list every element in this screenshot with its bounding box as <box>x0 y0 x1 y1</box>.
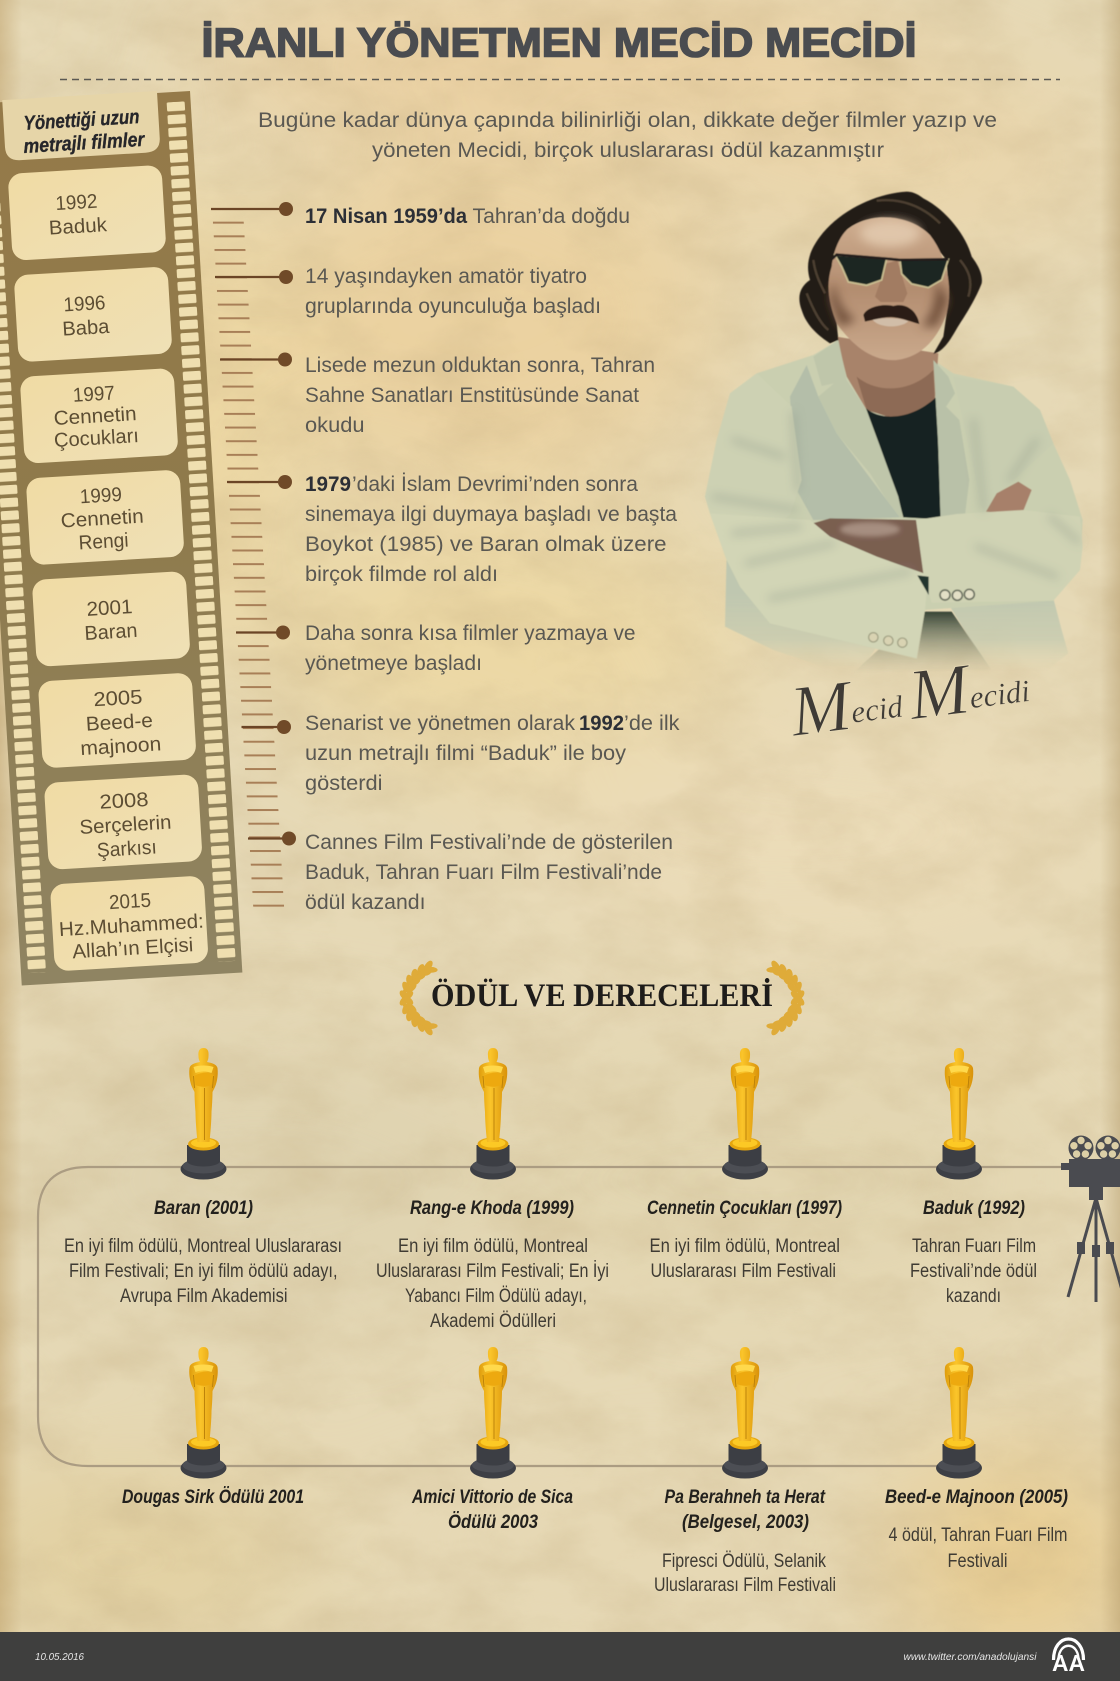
award: Baran 2001: Avrupa Film Akademisi <box>120 1286 288 1307</box>
lower jacket flaps <box>725 553 1068 673</box>
award: Pa Berahneh ta Herat <box>654 1347 836 1596</box>
film frame: 2008 Serçelerin Şarkısı: Serçelerin <box>79 812 172 839</box>
oscar statuette <box>722 1347 768 1478</box>
film frame: 2001 Baran: Baran <box>84 620 138 645</box>
signature: ecidi <box>968 673 1032 715</box>
hair <box>799 192 982 354</box>
left upper arm <box>705 373 802 560</box>
award: Pa Berahneh ta Herat: Pa Berahneh ta Herat <box>664 1487 826 1508</box>
heading text: ÖDÜL VE DERECELERİ <box>431 976 773 1014</box>
hair highlights <box>807 200 970 330</box>
laurel left <box>398 960 438 1036</box>
award: Rang-e Khoda 1999: Rang-e Khoda (1999) <box>410 1198 574 1219</box>
bio: school: Sahne Sanatları Enstitüsünde Sanat <box>305 384 639 407</box>
bio: birth <box>305 205 630 228</box>
film frame: 1999 Cennetin Rengi: 1999 <box>79 484 122 508</box>
timeline ruler ticks <box>212 208 285 918</box>
award: Baduk 1992: kazandı <box>946 1286 1001 1307</box>
header text: Yönettiği uzun <box>23 106 140 135</box>
signature <box>785 641 1034 752</box>
oscar statuette <box>936 1048 982 1180</box>
film strip: feature films <box>0 89 242 986</box>
bio: theatre: 14 yaşındayken amatör tiyatro <box>305 265 587 288</box>
sprocket holes <box>0 101 236 973</box>
film frame: 2008 Serçelerin Şarkısı: 2008 <box>99 789 149 814</box>
film frame: 1999 Cennetin Rengi: Cennetin <box>60 506 144 533</box>
marker 7 <box>248 832 296 846</box>
twitter url: www.twitter.com/anadolujansi <box>904 1651 1037 1663</box>
left sleeve <box>710 513 928 658</box>
sunglasses <box>832 255 948 288</box>
award: Beed-e Majnoon 2005: 4 ödül, Tahran Fuarı Film <box>888 1525 1068 1546</box>
tripod <box>1068 1198 1120 1302</box>
bio: theatre <box>305 265 601 318</box>
film frame: 2005 Beed-e majnoon: majnoon <box>80 733 162 760</box>
bio: Cannes: Baduk, Tahran Fuarı Film Festivali’nde <box>305 861 662 884</box>
bio: short films <box>305 622 636 675</box>
right chest <box>953 377 1053 513</box>
award: Cennetin Çocukları 1997 <box>647 1048 842 1282</box>
award: Douglas Sirk: Dougas Sirk Ödülü 2001 <box>122 1487 304 1508</box>
bio: short films: Daha sonra kısa filmler yazmaya ve <box>305 622 636 645</box>
face <box>829 217 949 360</box>
bio: Cannes: ödül kazandı <box>305 891 426 914</box>
signature: M <box>785 665 859 752</box>
film reels <box>1068 1136 1120 1160</box>
bio: 1992: uzun metrajlı filmi “Baduk” ile boy <box>305 742 627 765</box>
film frame: 1999 Cennetin Rengi: Rengi <box>78 530 129 554</box>
film frame: 1996 Baba: Baba <box>62 316 111 341</box>
film frame: 2015 Hz.Muhammed: Hz.Muhammed: <box>58 911 204 941</box>
award: Baduk 1992: Festivali’nde ödül <box>910 1261 1037 1282</box>
right hand <box>986 482 1032 513</box>
award: Pa Berahneh ta Herat: Uluslararası Film Festivali <box>654 1575 836 1596</box>
film frame: 2015 Hz.Muhammed: 2015 <box>108 890 152 914</box>
jacket folds <box>713 413 1078 598</box>
awards path line <box>38 1167 1062 1466</box>
bio: school: Lisede mezun olduktan sonra, Tahran <box>305 354 655 377</box>
award: Rang-e Khoda 1999: Uluslararası Film Festivali; En İyi <box>376 1261 609 1282</box>
neck <box>837 337 938 421</box>
film frame: 1996 Baba: 1996 <box>63 292 106 317</box>
bio: 1979 <box>305 473 677 586</box>
t-shirt <box>866 397 941 519</box>
award: Baran 2001: En iyi film ödülü, Montreal Uluslararası <box>64 1236 342 1257</box>
award: Cennetin Çocukları 1997: En iyi film ödülü, Montreal <box>650 1236 840 1257</box>
biography timeline <box>211 202 680 914</box>
award: Rang-e Khoda 1999 <box>376 1048 609 1332</box>
award: Douglas Sirk <box>122 1347 304 1508</box>
bio: Cannes: Cannes Film Festivali’nde de gösterilen <box>305 831 673 854</box>
award: Beed-e Majnoon 2005 <box>885 1347 1068 1572</box>
award: Amici Vittorio de Sica <box>411 1347 573 1533</box>
award: Pa Berahneh ta Herat: Fipresci Ödülü, Selanik <box>662 1551 826 1572</box>
award: Baduk 1992: Baduk (1992) <box>923 1198 1025 1219</box>
header text: metrajlı filmler <box>23 129 146 158</box>
neck shadow <box>857 370 935 420</box>
bare forearm <box>813 518 929 575</box>
laurel right <box>766 960 806 1036</box>
marker 5 <box>236 626 290 640</box>
header pane <box>2 91 161 161</box>
oscar statuette <box>470 1347 516 1478</box>
film frame: 2001 Baran: 2001 <box>86 596 133 621</box>
award: Baran 2001 <box>64 1048 342 1307</box>
film frame: 1992 Baduk: 1992 <box>55 191 98 215</box>
award: Cennetin Çocukları 1997: Cennetin Çocukları (1997) <box>647 1198 842 1219</box>
oscar statuette <box>470 1048 516 1180</box>
date: 10.05.2016 <box>35 1651 84 1663</box>
bio: 1979: 1979 <box>305 473 351 496</box>
bio: 1992: ’de ilk <box>624 712 680 735</box>
left lapel <box>813 340 903 517</box>
marker 1 <box>211 202 293 216</box>
nose <box>875 261 907 302</box>
film frame: 2005 Beed-e majnoon: 2005 <box>93 686 143 711</box>
film frame: 2005 Beed-e majnoon: Beed-e <box>85 710 153 736</box>
film frame: 1997 Cennetin Çocukları: Cennetin <box>53 403 137 430</box>
award: Baran 2001: Baran (2001) <box>154 1198 253 1219</box>
award: Pa Berahneh ta Herat: (Belgesel, 2003) <box>682 1512 809 1533</box>
intro text <box>258 109 997 162</box>
bio: 1979: birçok filmde rol aldı <box>305 563 498 586</box>
right sleeve <box>916 510 1083 603</box>
bio: birth: Tahran’da doğdu <box>472 205 630 228</box>
forearm highlight <box>840 522 900 537</box>
film frame: 1997 Cennetin Çocukları: Çocukları <box>53 425 140 452</box>
bio: short films: yönetmeye başladı <box>305 652 482 675</box>
award: Cennetin Çocukları 1997: Uluslararası Film Festivali <box>650 1261 836 1282</box>
film frame: 1992 Baduk <box>8 165 166 261</box>
bio: 1992: Senarist ve yönetmen olarak <box>305 712 576 735</box>
film frame: 1992 Baduk: Baduk <box>48 214 108 240</box>
bio: school: okudu <box>305 414 364 437</box>
award: Beed-e Majnoon 2005: Beed-e Majnoon (2005) <box>885 1487 1068 1508</box>
film frame: 2001 Baran <box>32 571 191 667</box>
film frame: 2015 Hz.Muhammed <box>50 875 209 971</box>
mouth <box>873 318 908 326</box>
film frame: 2008 Serçelerin Şarkısı: Şarkısı <box>96 837 157 862</box>
cuff buttons right <box>940 589 974 600</box>
marker 6 <box>242 720 291 734</box>
intro text: yöneten Mecidi, birçok uluslararası ödül kazanmıştır <box>372 139 884 162</box>
film frame: 2008 Serçelerin Şarkısı <box>44 774 203 870</box>
film frame: 1999 Cennetin Rengi <box>26 469 185 565</box>
award: Baduk 1992 <box>910 1048 1037 1307</box>
film frame: 1997 Cennetin Çocukları: 1997 <box>72 382 115 407</box>
bio: 1979: Boykot (1985) ve Baran olmak üzere <box>305 533 666 556</box>
award: Rang-e Khoda 1999: Akademi Ödülleri <box>430 1311 556 1332</box>
film camera on tripod <box>1061 1136 1120 1302</box>
bio: theatre: gruplarında oyunculuğa başladı <box>305 295 601 318</box>
film frame: 2005 Beed-e majnoon <box>38 672 197 768</box>
bio: school <box>305 354 655 437</box>
icon: AA logo <box>1052 1639 1085 1676</box>
signature: ecid <box>849 688 912 730</box>
intro text: Bugüne kadar dünya çapında bilinirliği olan, dikkate değer filmler yazıp ve <box>258 109 997 132</box>
title: İRANLI YÖNETMEN MECİD MECİDİ <box>202 20 916 66</box>
bio: Cannes <box>305 831 673 914</box>
film frame: 1997 Cennetin Çocukları <box>20 368 179 464</box>
face shading <box>830 220 948 327</box>
award: Rang-e Khoda 1999: Yabancı Film Ödülü adayı, <box>405 1286 587 1307</box>
film frame: 2015 Hz.Muhammed: Allah’ın Elçisi <box>72 934 194 963</box>
bio: 1992: 1992 <box>579 712 624 735</box>
bio: 1992 <box>305 712 680 795</box>
shadow below arms <box>853 612 992 673</box>
footer bar <box>0 1632 1120 1681</box>
bio: birth: 17 Nisan 1959’da <box>305 205 467 228</box>
awards heading <box>398 960 806 1036</box>
moustache <box>863 305 919 324</box>
icon: AA logo: AA <box>1052 1650 1085 1676</box>
oscar statuette <box>722 1048 768 1180</box>
marker 2 <box>215 270 293 284</box>
award: Amici Vittorio de Sica: Amici Vittorio de Sica <box>411 1487 573 1508</box>
bio: 1979: ’daki İslam Devrimi’nden sonra <box>352 473 638 496</box>
left chest <box>790 365 900 520</box>
portrait of Majid Majidi <box>705 192 1083 673</box>
marker 4 <box>227 475 292 489</box>
right lapel <box>933 360 969 519</box>
cuff buttons left <box>869 633 907 647</box>
award: Baduk 1992: Tahran Fuarı Film <box>912 1236 1036 1257</box>
award: Baran 2001: Film Festivali; En iyi film ödülü adayı, <box>69 1261 338 1282</box>
award: Beed-e Majnoon 2005: Festivali <box>948 1551 1008 1572</box>
signature: M <box>903 648 977 735</box>
oscar statuette <box>180 1048 226 1180</box>
film frame: 1996 Baba <box>14 266 173 362</box>
jacket silhouette <box>705 340 1083 658</box>
title divider <box>60 78 1060 80</box>
bio: 1992: gösterdi <box>305 772 382 795</box>
oscar statuette <box>936 1347 982 1478</box>
award: Rang-e Khoda 1999: En iyi film ödülü, Montreal <box>398 1236 588 1257</box>
sleeve slit <box>917 575 929 595</box>
film strip body <box>0 91 242 986</box>
oscar statuette <box>180 1347 226 1478</box>
bio: 1979: sinemaya ilgi duymaya başladı ve başta <box>305 503 677 526</box>
marker 3 <box>220 352 292 366</box>
award: Amici Vittorio de Sica: Ödülü 2003 <box>448 1512 538 1533</box>
header text <box>22 106 146 158</box>
